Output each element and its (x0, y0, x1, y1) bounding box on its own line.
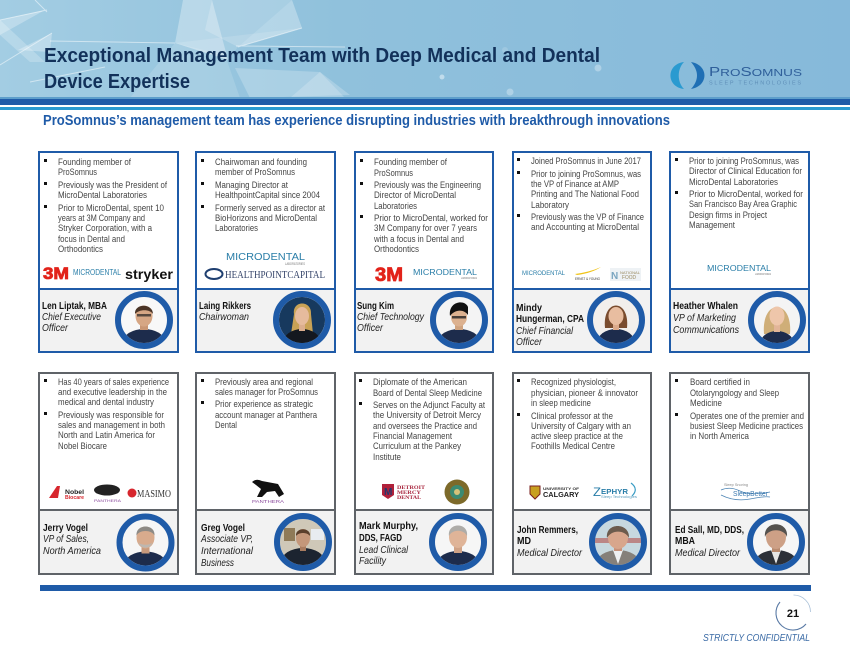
page number: 21 (787, 608, 799, 620)
bio text: Board certified in (690, 377, 750, 387)
bio text: the VP of Finance at AMP (531, 179, 619, 189)
logos: CALGARY (543, 490, 579, 499)
header banner (0, 0, 850, 98)
logos: DENTAL (397, 495, 421, 501)
name and role: Hungerman, CPA (516, 313, 584, 325)
title: Device Expertise (44, 71, 190, 93)
bio text: Laboratories (374, 201, 417, 211)
bio text: years at 3M Company and (58, 213, 145, 223)
logos: MASIMO (137, 488, 171, 500)
logos: 3M (375, 265, 403, 286)
name and role: Laing Rikkers (199, 300, 251, 312)
bio text: Prior experience as strategic (215, 399, 313, 409)
logos (43, 264, 174, 283)
name and role: Medical Director (517, 547, 582, 559)
logo: LABORATORIES (755, 272, 771, 276)
name and role (516, 302, 584, 348)
logos (530, 483, 637, 499)
bio text: Previously was the Engineering (374, 180, 481, 190)
bio text: Design firms in Project (689, 210, 767, 220)
logos: Z (593, 485, 601, 499)
bio text: Financial Management (373, 431, 452, 441)
bio text: Managing Director at (215, 180, 288, 190)
bio text: member of ProSomnus (215, 167, 295, 177)
name and role (673, 300, 740, 336)
name and role: VP of Marketing (673, 312, 736, 324)
bio text: and executive leadership in the (58, 387, 167, 397)
portrait (276, 294, 328, 357)
bio text (360, 157, 488, 254)
name and role (517, 524, 582, 559)
logos: Sleep Technologies (601, 495, 637, 499)
bio text (517, 156, 644, 232)
bio text: Clinical professor at the (531, 411, 613, 421)
bio text: Director of MicroDental (374, 190, 456, 200)
name and role: DDS, FAGD (359, 532, 402, 544)
logo: ProSomnus (670, 62, 802, 89)
bio text: Prior to MicroDental, spent 10 (58, 203, 164, 213)
bio text (201, 157, 325, 233)
bio text: Orthodontics (58, 244, 103, 254)
name and role: Facility (359, 555, 387, 567)
name and role: Mindy (516, 302, 542, 314)
name and role (200, 522, 254, 569)
logos: PANTHERA (94, 499, 122, 503)
logos: MERCY (397, 490, 421, 496)
name and role (43, 522, 101, 557)
logos: ERNST & YOUNG (575, 277, 600, 281)
portrait (433, 294, 485, 355)
name and role: Sung Kim (357, 300, 394, 312)
bio text: Previously was the President of (58, 180, 167, 190)
logos: LABORATORIES (461, 276, 477, 280)
logos: NATIONAL (620, 271, 640, 275)
logos: Nobel (65, 490, 84, 496)
panel: Ed Sall (670, 373, 809, 578)
logo: SleepBetter (721, 483, 770, 500)
bio text (675, 156, 803, 230)
name and role: Jerry Vogel (43, 522, 88, 534)
bio text: Formerly served as a director at (215, 203, 325, 213)
name and role: VP of Sales, (43, 533, 89, 545)
bio text: sales and management in both (58, 420, 165, 430)
portrait (592, 516, 644, 578)
bio text: Curriculum at the Pankey (373, 441, 461, 451)
portrait (750, 516, 802, 578)
name and role: John Remmers, (517, 524, 578, 536)
name and role: Len Liptak, MBA (42, 300, 107, 312)
portrait (277, 516, 329, 576)
bio text: Management (689, 220, 735, 230)
bio text (517, 377, 638, 451)
logos: MICRODENTAL (522, 271, 566, 277)
portrait (120, 516, 172, 578)
logos: MICRODENTAL (226, 251, 305, 263)
name and role: Chief Financial (516, 325, 574, 337)
bio text: Board of Dental Sleep Medicine (373, 388, 482, 398)
logos (522, 267, 641, 282)
name and role: International (201, 545, 254, 557)
logos: stryker (125, 266, 174, 282)
logo: SleepBetter: Sleep Snoring (724, 483, 748, 487)
name and role: Officer (516, 336, 542, 348)
logo: ProSomnus: SLEEP TECHNOLOGIES (709, 80, 801, 86)
logos: UNIVERSITY OF (543, 486, 580, 491)
name and role: MBA (675, 535, 695, 547)
bio text: Previously was the VP of Finance (531, 212, 644, 222)
name and role (357, 300, 425, 334)
name and role: Lead Clinical (359, 544, 409, 556)
logos: M (384, 487, 392, 498)
bio text: Operates one of the premier and (690, 411, 804, 421)
name and role: North America (43, 545, 101, 557)
bio text: Prior to MicroDental, worked for (689, 189, 803, 199)
name and role: Chairwoman (199, 311, 249, 323)
logos: LABORATORIES (285, 262, 305, 266)
bio text: North and Latin America for (58, 430, 155, 440)
bio text: ProSomnus (374, 168, 413, 178)
bio text (44, 157, 167, 254)
bio text: sales manager for ProSomnus (215, 387, 318, 397)
name and role: Officer (357, 322, 383, 334)
name and role: Mark Murphy, (359, 520, 418, 532)
portrait (751, 294, 803, 357)
logos (206, 251, 325, 281)
bio text: 3M Company for over 7 years (374, 223, 477, 233)
logo: Panthera: PANTHERA (252, 499, 284, 504)
bio text: active sleep practice at the (531, 431, 623, 441)
bio text (201, 377, 318, 430)
bio text: in North America (690, 431, 749, 441)
bio text: and oversees the Practice and (373, 421, 477, 431)
bio text: Director of Clinical Education for (689, 166, 802, 176)
bio text: ProSomnus (58, 167, 97, 177)
bio text: Printing and The National Food (531, 189, 639, 199)
bio text: Prior to joining ProSomnus, was (689, 156, 799, 166)
bio text: Otolaryngology and Sleep (690, 388, 779, 398)
panel: Sung Kim (355, 152, 493, 355)
bio text: Serves on the Adjunct Faculty at (373, 400, 485, 410)
bio text: Joined ProSomnus in June 2017 (531, 156, 641, 166)
portrait (590, 294, 642, 357)
bio text: Has 40 years of sales experience (58, 377, 169, 387)
logo: MICRODENTAL (707, 263, 771, 273)
bio text: Dental (215, 420, 237, 430)
header stripes (0, 97, 850, 110)
bio text: MicroDental Laboratories (689, 177, 778, 187)
logos: HEALTHPOINTCAPITAL (225, 270, 325, 281)
name and role: Chief Executive (42, 311, 101, 323)
bio text: physician, pioneer & innovator (531, 388, 638, 398)
name and role: Ed Sall, MD, DDS, (675, 524, 744, 536)
logos: Biocare (65, 495, 84, 501)
title (44, 45, 600, 93)
bio text: MicroDental Laboratories (58, 190, 147, 200)
footer bar (40, 585, 811, 591)
bio text: the University of Detroit Mercy (373, 410, 481, 420)
logos (49, 484, 171, 503)
panel: Greg Vogel (196, 373, 335, 576)
logos (375, 265, 477, 286)
subtitle: ProSomnus’s management team has experience disrupting industries with breakthrough innovations (43, 113, 670, 129)
portrait (118, 294, 170, 355)
bio text (44, 377, 169, 451)
logos: 3M (43, 264, 69, 283)
bio text: focus in Dental and (58, 234, 125, 244)
bio text: Laboratory (531, 200, 569, 210)
page number (776, 595, 810, 630)
bio text: Prior to MicroDental, worked for (374, 213, 488, 223)
bio text: Medicine (690, 398, 722, 408)
name and role: Chief Technology (357, 311, 425, 323)
panel: Mindy Hungerman (513, 152, 651, 357)
bio text: Foothills Medical Centre (531, 441, 615, 451)
bio text: Institute (373, 452, 401, 462)
panel: Len Liptak (39, 152, 178, 355)
bio text: busiest Sleep Medicine practices (690, 421, 803, 431)
bio text: Founding member of (58, 157, 131, 167)
name and role (359, 520, 418, 567)
bio text: University of Calgary with an (531, 421, 631, 431)
name and role (675, 524, 744, 559)
logos: MICRODENTAL (413, 267, 477, 277)
logos: FOOD (622, 275, 636, 281)
bio text (359, 377, 485, 462)
logos: N (611, 271, 618, 282)
logos (382, 480, 470, 504)
bio text: Previously area and regional (215, 377, 313, 387)
logos: DETROIT (397, 485, 425, 491)
bio text: in sleep medicine (531, 398, 591, 408)
logos: MICRODENTAL (73, 268, 121, 277)
confidentiality note: STRICTLY CONFIDENTIAL (703, 633, 810, 644)
name and role: Business (201, 557, 235, 569)
name and role (42, 300, 107, 334)
bio text: and Accounting at MicroDental (531, 222, 639, 232)
bio text: Recognized physiologist, (531, 377, 616, 387)
name and role: Communications (673, 324, 740, 336)
bio text: Nobel Biocare (58, 441, 107, 451)
name and role: Heather Whalen (673, 300, 738, 312)
bio text: with a focus in Dental and (373, 234, 464, 244)
name and role: Medical Director (675, 547, 740, 559)
name and role: Greg Vogel (201, 522, 245, 534)
bio text: Stryker Corporation, with a (58, 223, 152, 233)
bio text: account manager at Panthera (215, 410, 317, 420)
bio text: Chairwoman and founding (215, 157, 307, 167)
panel: Heather Whalen (670, 152, 809, 357)
panel: John Remmers (513, 373, 651, 578)
portrait (432, 516, 484, 577)
logo: Panthera (252, 480, 284, 504)
bio text: Orthodontics (374, 244, 419, 254)
name and role (199, 300, 251, 323)
name and role: Associate VP, (200, 533, 253, 545)
bio text: HealthpointCapital since 2004 (215, 190, 320, 200)
bio text: Previously was responsible for (58, 410, 164, 420)
name and role: Officer (42, 322, 68, 334)
bio text: medical and dental industry (58, 397, 154, 407)
title: Exceptional Management Team with Deep Medical and Dental (44, 45, 600, 67)
name and role: MD (517, 535, 531, 547)
bio text: San Francisco Bay Area Graphic (689, 199, 797, 209)
bio text: BioHorizons and MicroDental (215, 213, 317, 223)
logo: ProSomnus: PRO SOMNUS (709, 64, 802, 79)
panel: Jerry Vogel (39, 373, 178, 578)
panel: Laing Rikkers (196, 152, 335, 357)
logo: SleepBetter: SleepBetter (733, 489, 768, 498)
panel: Mark Murphy (355, 373, 493, 577)
logos: EPHYR (601, 489, 628, 496)
bio text: Founding member of (374, 157, 447, 167)
bio text: Laboratories (215, 223, 258, 233)
bio text: Diplomate of the American (373, 377, 467, 387)
bio text: Prior to joining ProSomnus, was (531, 169, 641, 179)
bio text (675, 377, 804, 441)
